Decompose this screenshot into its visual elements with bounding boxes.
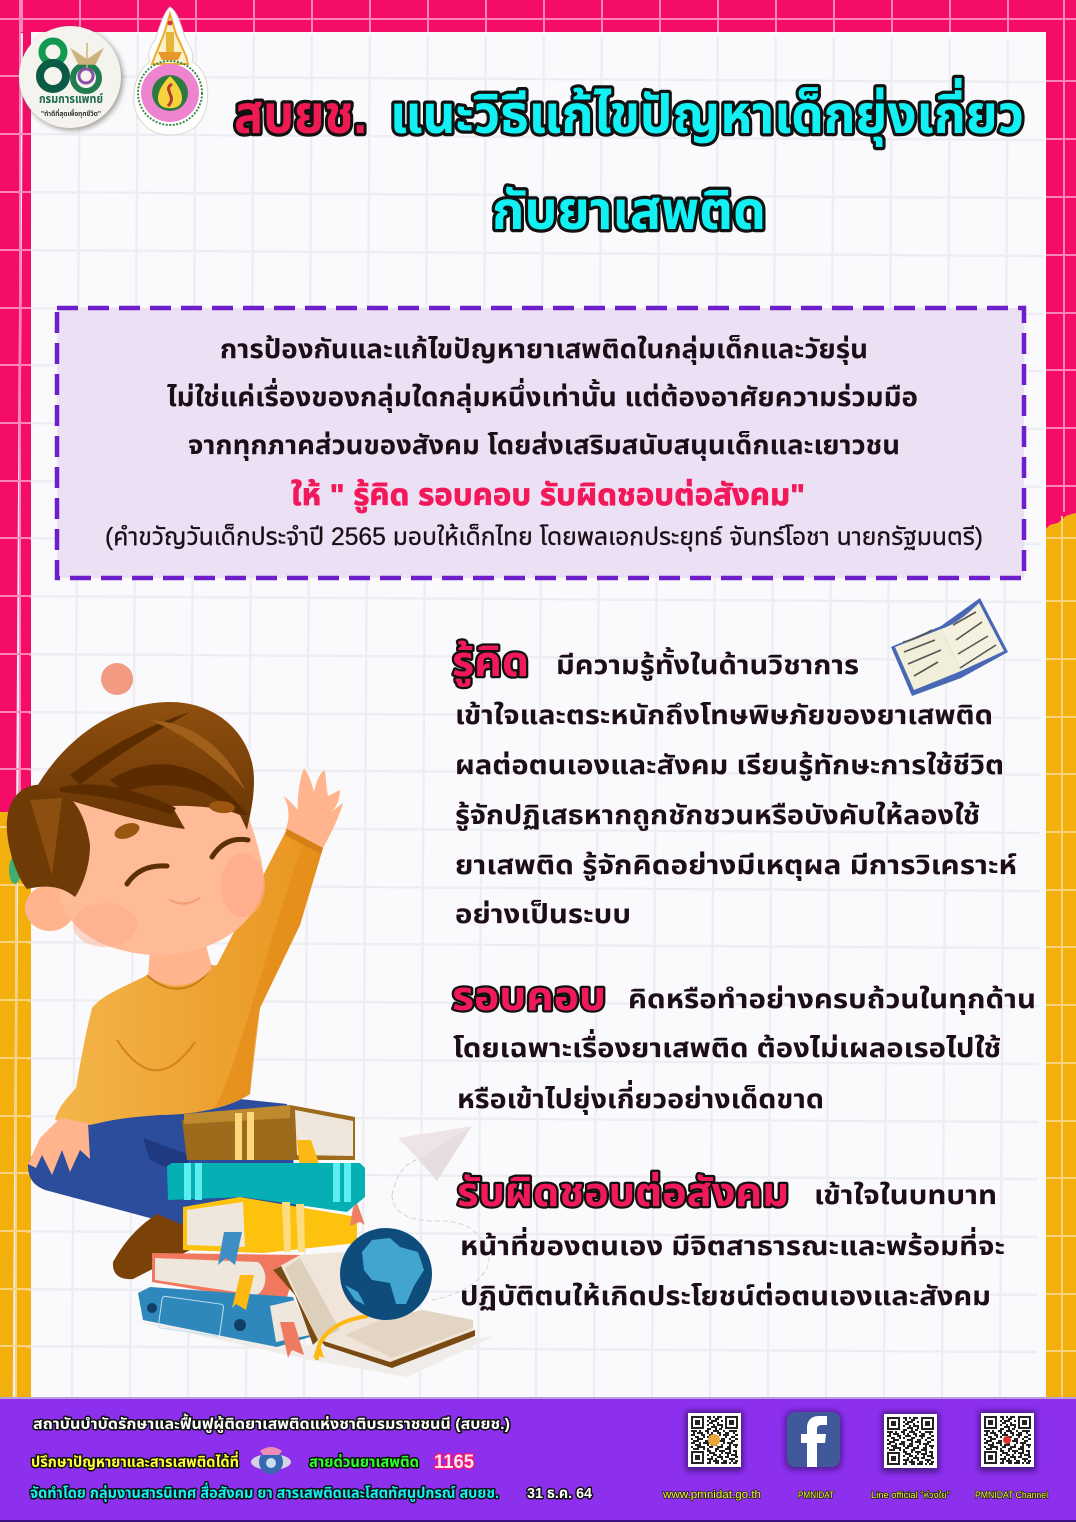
- icon: Facebook with caption: PMNIDAT: [798, 1490, 834, 1500]
- illustration: boy raising hand: [7, 663, 343, 1279]
- section: รู้คิด: ผลต่อตนเองและสังคม เรียนรู้ทักษะการใช้ชีวิต: [455, 750, 1004, 781]
- shirt: [55, 829, 323, 1125]
- panel: children's day motto: ไม่ใช่แค่เรื่องของกลุ่มใดกลุ่มหนึ่งเท่านั้น แต่ต้องอาศัยความร่วมมือ: [167, 378, 918, 413]
- title line 1: สบยช.: [234, 86, 367, 145]
- hotline number: 1165: [434, 1452, 474, 1473]
- open book: [273, 1252, 473, 1367]
- globe: [340, 1228, 432, 1320]
- QR: website: [662, 1411, 761, 1501]
- body text: มีความรู้ทั้งในด้านวิชาการ: [556, 647, 859, 681]
- icon: Facebook with caption: [785, 1411, 842, 1500]
- panel intro text: การป้องกันและแก้ไขปัญหายาเสพติดในกลุ่มเด็กและวัยรุ่น: [220, 334, 868, 365]
- smiling eyes and mouth: [127, 839, 248, 884]
- section: รอบคอบ: หรือเข้าไปยุ่งเกี่ยวอย่างเด็ดขาด: [457, 1080, 824, 1115]
- neck: [148, 945, 212, 985]
- section: รู้คิด: อย่างเป็นระบบ: [455, 899, 631, 929]
- paper plane: [392, 1126, 489, 1300]
- blue book: [138, 1287, 310, 1347]
- section: รอบคอบ: โดยเฉพาะเรื่องยาเสพติด ต้องไม่เผลอเรอไปใช้: [453, 1029, 1001, 1063]
- institute name: สถาบันบำบัดรักษาและฟื้นฟูผู้ติดยาเสพติดแห่งชาติบรมราชชนนี (สบยช.): [33, 1413, 510, 1434]
- grid lines on yellow frame: [0, 516, 1076, 1412]
- body text: คิดหรือทำอย่างครบถ้วนในทุกด้าน: [628, 984, 1036, 1015]
- lower hand: [28, 1118, 90, 1175]
- shoe: [113, 1214, 190, 1279]
- QR: PMNIDAT Channel: PMNIDAT Channel: [975, 1490, 1048, 1500]
- icon: telephone: [251, 1447, 291, 1474]
- shadow: [130, 1320, 493, 1377]
- section: รู้คิด: เข้าใจและตระหนักถึงโทษพิษภัยของยาเสพติด: [455, 700, 993, 730]
- producer credit: จัดทำโดย กลุ่มงานสารนิเทศ สื่อสังคม ยา สารเสพติดและโสตทัศนูปกรณ์ สบยช.: [30, 1482, 499, 1503]
- body text: เข้าใจในบทบาท: [814, 1180, 997, 1210]
- decorative dot: [101, 663, 133, 695]
- green collar hint: [9, 856, 21, 884]
- hair top: [35, 702, 254, 830]
- logo: Department of Medical Services 80 years: [19, 26, 123, 130]
- motto attribution: (คำขวัญวันเด็กประจำปี 2565 มอบให้เด็กไทย โดยพลเอกประยุทธ์ จันทร์โอชา นายกรัฐมนตรี): [105, 523, 983, 552]
- heading: รู้คิด: [452, 638, 529, 687]
- section: รู้คิด: รู้จักปฏิเสธหากถูกชักชวนหรือบังคับให้ลองใช้: [455, 800, 980, 831]
- hair side: [7, 785, 90, 897]
- panel: children's day motto: [57, 308, 1024, 578]
- consultation text: ปรึกษาปัญหายาและสารเสพติดได้ที่: [31, 1451, 239, 1471]
- hotline label: สายด่วนยาเสพติด: [309, 1453, 419, 1471]
- title: [234, 78, 1024, 241]
- section: รู้คิด: ยาเสพติด รู้จักคิดอย่างมีเหตุผล มีการวิเคราะห์: [455, 850, 1017, 881]
- brown book: [182, 1105, 355, 1160]
- section: รู้คิด: [452, 638, 1017, 929]
- footer band: [0, 1397, 1076, 1522]
- QR: Line official: Line official "ห่วงใย": [871, 1490, 950, 1500]
- face: [58, 790, 264, 955]
- QR: Line official: [871, 1412, 950, 1500]
- ear: [25, 885, 75, 931]
- icon: open notebook: [891, 598, 1008, 696]
- heading: รอบคอบ: [452, 975, 606, 1019]
- eyebrows: [112, 820, 142, 842]
- logo caption: กรมการแพทย์: [39, 92, 103, 106]
- title line 2: กับยาเสพติด: [492, 182, 766, 241]
- teal book: [167, 1163, 365, 1212]
- QR: PMNIDAT Channel: [975, 1411, 1048, 1500]
- section: รับผิดชอบต่อสังคม: ปฏิบัติตนให้เกิดประโยชน์ต่อตนเองและสังคม: [460, 1281, 991, 1311]
- raised hand: [283, 768, 343, 848]
- title: แนะวิธีแก้ไขปัญหาเด็กยุ่งเกี่ยว: [390, 78, 1024, 147]
- grid lines on pink frame: [0, 0, 1076, 812]
- logo: Department of Medical Services 80 years: "ทำดีที่สุดเพื่อทุกชีวิต": [41, 108, 101, 119]
- section: รับผิดชอบต่อสังคม: [457, 1170, 1005, 1311]
- heading: รับผิดชอบต่อสังคม: [457, 1170, 789, 1215]
- QR: website: www.pmnidat.go.th: [662, 1489, 761, 1501]
- blue bookmark: [218, 1232, 242, 1265]
- motto in red: ให้ " รู้คิด รอบคอบ รับผิดชอบต่อสังคม": [291, 479, 805, 513]
- section: รอบคอบ: [452, 975, 1036, 1115]
- logo: PMNIDAT institute lotus seal: [134, 7, 208, 135]
- section: รับผิดชอบต่อสังคม: หน้าที่ของตนเอง มีจิตสาธารณะและพร้อมที่จะ: [460, 1227, 1005, 1261]
- panel: children's day motto: จากทุกภาคส่วนของสังคม โดยส่งเสริมสนับสนุนเด็กและเยาวชน: [188, 430, 900, 461]
- pants: [28, 1099, 300, 1228]
- date: 31 ธ.ค. 64: [527, 1485, 593, 1502]
- salmon book: [152, 1253, 300, 1299]
- illustration: stack of books and globe: [130, 1105, 493, 1377]
- yellow book: [183, 1197, 357, 1253]
